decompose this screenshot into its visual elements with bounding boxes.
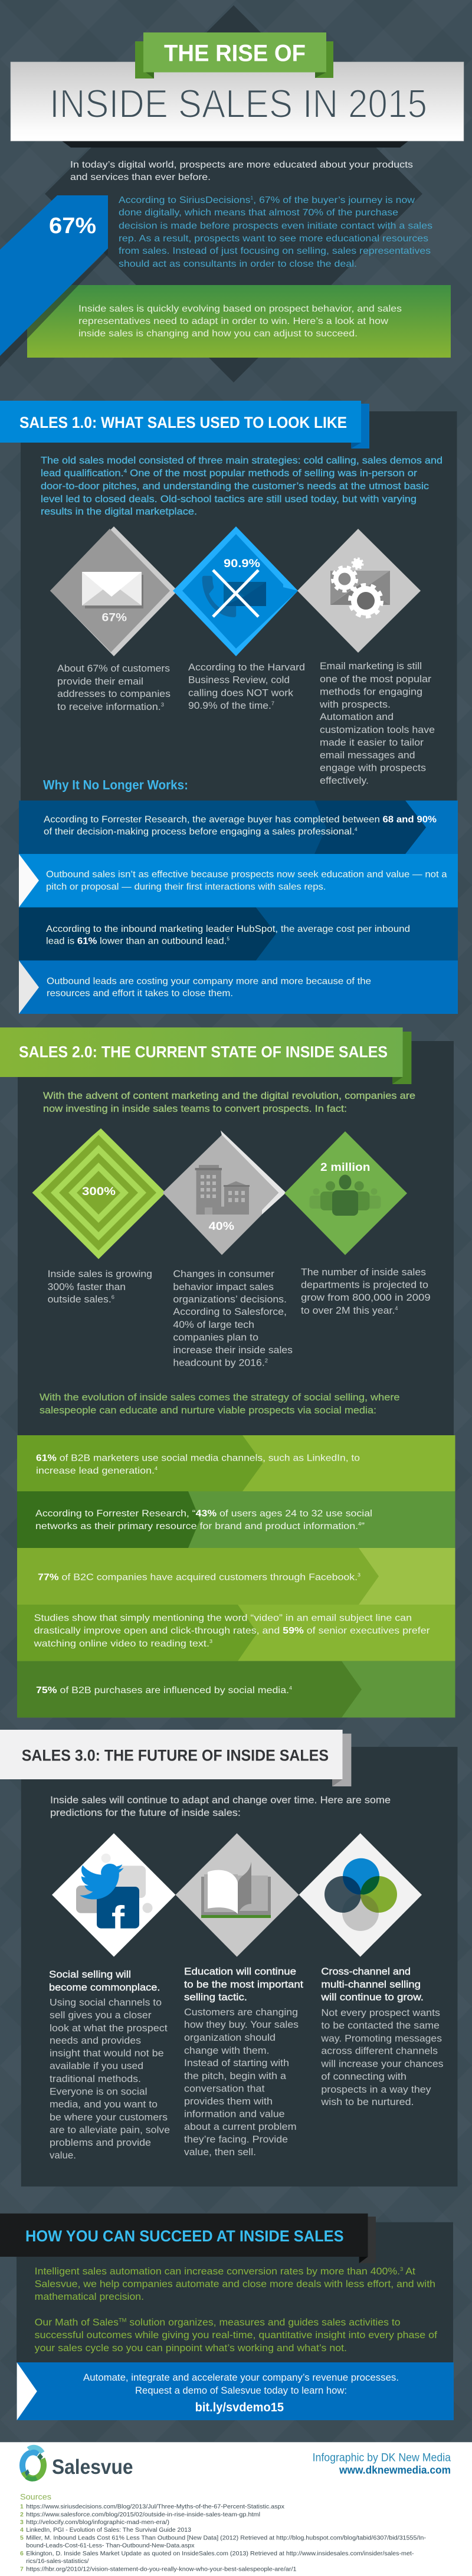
panel: sales 3.0 — [0, 1730, 458, 2187]
bar: video 59 percent: watching online video to reading text. — [34, 1639, 189, 1649]
bar: 43 percent forrester: ” — [361, 1521, 365, 1531]
callout: 67 percent blue ribbon: 67% — [49, 214, 96, 238]
bar: forrester 68 and 90 percent: 4 — [355, 827, 358, 832]
text block: cross-channel: prospects in a way they — [321, 2084, 431, 2095]
bar: forrester 68 and 90 percent: According to Forrester Research, the average buyer has completed between 68 and 90% — [44, 814, 437, 824]
text block: siriusdecisions: done digitally, which means that almost 70% of the purchase — [119, 208, 398, 218]
heading ribbon: sales 1.0 — [0, 401, 369, 449]
text block: email marketing: with prospects. — [319, 699, 391, 710]
sources: LinkedIn, PGI - Evolution of Sales: The Survival Guide 2013 — [26, 2526, 191, 2534]
text block: inside sales departments: to over 2M this year. — [301, 1305, 391, 1316]
text block: social selling: be where your customers — [50, 2112, 168, 2123]
text block: consumer behavior: Changes in consumer — [173, 1268, 274, 1279]
text block: consumer behavior: increase their inside sales — [173, 1344, 293, 1356]
text block: email marketing: one of the most popular — [320, 673, 431, 685]
bar: 43 percent forrester: networks as their primary resource for brand and product information. — [35, 1521, 325, 1531]
heading ribbon: succeed: HOW YOU CAN SUCCEED AT INSIDE SALES — [25, 2227, 344, 2245]
text block: social selling intro: salespeople can educate and nurture viable prospects via social media: — [40, 1405, 376, 1416]
text block: intelligent automation: Intelligent sales automation can increase conversion rates by more than 400%. — [35, 2266, 385, 2277]
heading ribbon: sales 2.0: SALES 2.0: THE CURRENT STATE OF INSIDE SALES — [19, 1043, 388, 1061]
sources: https://www.siriusdecisions.com/Blog/2013/Jul/Three-Myths-of-the-67-Percent-Statistic.aspx — [26, 2503, 285, 2510]
text block: social selling intro — [40, 1392, 400, 1416]
text block: consumer behavior — [173, 1268, 293, 1369]
text block: social selling: needs and provides — [50, 2035, 141, 2046]
icon: social diamond — [52, 1833, 176, 1957]
text block: siriusdecisions: from sales. Instead of just focusing on selling, sales representatives — [119, 246, 431, 256]
sources: 6 — [20, 2550, 24, 2557]
title: the rise of: THE RISE OF — [164, 40, 306, 66]
sources: 5 — [20, 2535, 24, 2542]
text block: education: Customers are changing — [184, 2007, 298, 2018]
icon: gears diamond — [297, 529, 421, 653]
heading ribbon: sales 2.0 — [0, 1027, 411, 1084]
sources: 1 — [20, 2503, 24, 2510]
text block: social selling: become commonplace. — [49, 1982, 160, 1993]
bar: outbound sales: Outbound sales isn’t as effective because prospects now seek education and value — not a — [46, 870, 447, 880]
icon: bird — [80, 1864, 123, 1899]
text block: cross-channel: Not every prospect wants — [321, 2007, 440, 2018]
gear: medium — [333, 567, 356, 591]
bar: hubspot 61 percent — [19, 908, 458, 961]
icon: facebook — [97, 1887, 139, 1942]
footer — [0, 2442, 472, 2576]
bar: hubspot 61 percent: 5 — [227, 936, 230, 941]
icon: email diamond 67 percent — [50, 526, 178, 656]
text block: old sales model: lead qualification. — [41, 467, 118, 479]
text block: education: value, then sell. — [184, 2146, 256, 2158]
call to action bar: Automate, integrate and accelerate your company’s revenue processes. — [83, 2372, 399, 2383]
text block: social selling: look at what the prospect — [50, 2022, 168, 2034]
text block: inside sales departments: 4 — [395, 1305, 398, 1311]
text block: email marketing: methods for engaging — [320, 686, 422, 698]
text block: 300 percent faster: outside sales. — [48, 1294, 109, 1305]
text block: math of sales — [35, 2317, 437, 2354]
bar: video 59 percent: 3 — [209, 1639, 213, 1644]
text block: old sales model: door-to-door pitches, and understanding the customer’s needs at the utmost basic — [41, 480, 430, 492]
sources: rics/16-sales-statistics/ — [26, 2558, 89, 2565]
bar: 77 percent b2c: 77% of B2C companies have acquired customers through Facebook. — [38, 1573, 328, 1583]
intro text — [70, 160, 413, 182]
bar: 61 percent b2b marketers: increase lead generation. — [36, 1466, 142, 1476]
text block: education: change with them. — [184, 2045, 270, 2056]
icon: email diamond 67 percent: 67% — [101, 611, 127, 624]
text block: 300 percent faster — [48, 1268, 152, 1305]
sources: 3 — [20, 2519, 24, 2526]
text block: harvard business review: According to the Harvard — [188, 662, 305, 673]
text block: cross-channel: multi-channel selling — [321, 1979, 421, 1990]
text block: email marketing — [319, 660, 435, 786]
sources: https://www.salesforce.com/blog/2015/02/outside-in-rise-inside-sales-team-gp.html — [26, 2511, 260, 2518]
text block: social selling: available if you used — [50, 2060, 143, 2071]
text block: email marketing: effectively. — [320, 775, 369, 786]
text block: social selling: traditional methods. — [50, 2073, 141, 2084]
text block: social selling: sell gives you a closer — [50, 2009, 152, 2021]
text block: harvard business review: 90.9% of the time. — [188, 700, 269, 711]
panel: how you can succeed — [0, 2214, 453, 2363]
text block: education: the pitch, begin with a — [184, 2070, 287, 2081]
bar: 43 percent forrester: 4 — [358, 1521, 362, 1527]
icon: buildings diamond 40 percent — [163, 1131, 286, 1255]
text block: cross-channel — [320, 1966, 444, 2107]
text block: email marketing: made it easier to tailor — [320, 737, 424, 748]
text block: education: organization should — [184, 2032, 276, 2043]
call to action bar — [17, 2362, 454, 2420]
bar: outbound leads — [19, 961, 458, 1014]
text block: siriusdecisions: should act as consultants in order to close the deal. — [119, 259, 357, 269]
text block: social selling: problems and provide — [50, 2137, 151, 2148]
text block: cross-channel: of connecting with — [321, 2071, 407, 2082]
text block: email marketing: engage with prospects — [320, 762, 426, 774]
bar: forrester 68 and 90 percent — [19, 800, 458, 854]
bar: 75 percent b2b purchases: 75% of B2B purchases are influenced by social media. — [36, 1685, 266, 1695]
text block: email marketing: email messages and — [320, 749, 415, 761]
icon: cold call diamond 90.9 percent: 90.9% — [224, 558, 260, 570]
text block: education: selling tactic. — [184, 1991, 247, 2003]
icon: people diamond 2 million: 2 million — [320, 1161, 371, 1174]
text block: consumer behavior: According to Salesforce, — [173, 1306, 287, 1317]
text block: cross-channel: will increase your chances — [320, 2058, 444, 2069]
bar: forrester 68 and 90 percent: of their decision-making process before engaging a sales professional. — [44, 827, 339, 837]
text block: old sales model: The old sales model consisted of three main strategies: cold calling, sales demos and — [41, 454, 442, 466]
text block: inside sales departments: The number of inside sales — [301, 1266, 426, 1278]
text block: intelligent automation: At — [403, 2266, 415, 2277]
bar: 61 percent b2b marketers: 4 — [155, 1466, 158, 1471]
logo: salesvue — [22, 2447, 133, 2479]
text block: 67 percent email addresses — [57, 663, 171, 712]
text block: cross-channel: across different channels — [321, 2045, 438, 2057]
icon: nested diamond 300 percent — [32, 1128, 166, 1259]
text block: old sales model: level led to closed deals. Old-school tactics are still used today, but with varying — [41, 493, 417, 505]
bar: hubspot 61 percent: lead is 61% lower than an outbound lead. — [46, 936, 221, 946]
text block: harvard business review: calling does NOT work — [188, 687, 294, 699]
text block: old sales model: 4 — [124, 468, 127, 474]
text block: 300 percent faster: 300% faster than — [48, 1281, 126, 1292]
text block: cross-channel: wish to be nurtured. — [320, 2096, 414, 2107]
sources: Miller, M. Inbound Leads Cost 61% Less Than Outbound [New Data] (2012) Retrieved at http://blog.hubspot.com/blog/tabid/6307/bid/31555/In- — [26, 2535, 427, 2542]
bar: video 59 percent: Studies show that simply mentioning the word “video” in an email subject line can — [34, 1613, 412, 1623]
text block: math of sales: successful outcomes while giving you real-time, quantitative insight into every phase of — [35, 2329, 437, 2341]
text block: consumer behavior: headcount by 2016. — [173, 1357, 261, 1369]
text block: intelligent automation: 3 — [400, 2266, 403, 2272]
text block: old sales model: results in the digital marketplace. — [41, 506, 197, 517]
sources — [20, 2492, 427, 2572]
bar: 75 percent b2b purchases: 4 — [289, 1685, 293, 1691]
text block: 67 percent email addresses: addresses to companies — [57, 688, 171, 699]
text block: education: Education will continue — [184, 1966, 296, 1977]
text block: 67 percent email addresses: provide their email — [57, 676, 143, 687]
text block: inside sales departments: grow from 800,000 in 2009 — [301, 1292, 431, 1303]
text block: education: information and value — [184, 2108, 285, 2120]
text block: siriusdecisions: rep. As a result, prospects want to see more educational resources — [119, 234, 428, 244]
sources: Sources — [20, 2492, 51, 2502]
bar: outbound sales — [19, 854, 458, 908]
text block: social selling: Social selling will — [49, 1969, 131, 1980]
text block: advent of content marketing: now investing in inside sales teams to convert prospects. In fact: — [43, 1103, 347, 1114]
bar: outbound leads: resources and effort it takes to close them. — [47, 988, 233, 999]
icon: book diamond — [176, 1833, 299, 1957]
sources: Elkington, D. Inside Sales Market Update as quoted on InsideSales.com (2013) Retrieved at http://www.insidesales.com/insider/sales-met- — [26, 2550, 414, 2557]
text block: intelligent automation: Salesvue, we help companies automate and close more deals with less effort, and with — [35, 2279, 435, 2290]
text block: predictions intro: predictions for the future of inside sales: — [50, 1807, 241, 1818]
text block: inside sales departments — [301, 1266, 431, 1316]
icon: nested diamond 300 percent: 300% — [82, 1186, 116, 1198]
text block: social selling: value. — [50, 2150, 76, 2161]
bar: 61 percent b2b marketers — [17, 1435, 455, 1491]
text block: social selling — [49, 1969, 170, 2161]
text block: predictions intro: Inside sales will continue to adapt and change over time. Here are some — [50, 1795, 391, 1806]
text block: education: conversation that — [184, 2083, 265, 2094]
intro text: In today’s digital world, prospects are more educated about your products — [70, 160, 413, 170]
sources: http://velocify.com/blog/infographic-mad-men-era/) — [26, 2519, 169, 2526]
text block: 67 percent email addresses: 3 — [161, 702, 164, 708]
sources: 4 — [20, 2526, 24, 2534]
bar: 61 percent b2b marketers: 61% of B2B marketers use social media channels, such as LinkedIn, to — [36, 1453, 360, 1464]
text block: cross-channel: to be contacted the same — [321, 2020, 440, 2031]
text block: old sales model: One of the most popular methods of selling was in-person or — [127, 467, 417, 479]
text block: email marketing: customization tools have — [320, 724, 435, 735]
text block: math of sales: your sales cycle so you can pinpoint what’s working and what’s not. — [35, 2342, 347, 2354]
panel: sales 2.0 — [0, 1027, 454, 1435]
text block: social selling: Everyone is on social — [50, 2086, 148, 2097]
panel: green evolving callout: representatives need to adapt in order to win. Here’s a look at how — [78, 316, 388, 326]
text block: math of sales: Our Math of Sales — [35, 2317, 116, 2328]
text block: harvard business review — [188, 662, 305, 711]
icon: overlapping circles diamond — [299, 1833, 422, 1957]
heading ribbon: sales 3.0 — [0, 1730, 351, 1786]
text block: education: about a current problem — [184, 2121, 297, 2132]
credit: dk new media — [313, 2451, 451, 2476]
text block: cross-channel: Cross-channel and — [321, 1966, 411, 1977]
panel: green evolving callout — [27, 285, 451, 358]
text block: inside sales departments: departments is projected to — [301, 1279, 428, 1290]
intro text: and services than ever before. — [70, 172, 211, 182]
text block: email marketing: Automation and — [320, 711, 394, 722]
text block: education: provides them with — [184, 2096, 273, 2107]
text block: siriusdecisions: 1 — [250, 195, 254, 201]
text block: advent of content marketing: With the advent of content marketing and the digital revolution, companies are — [43, 1090, 415, 1101]
bar: 43 percent forrester: According to Forrester Research, “ 43% of users ages 24 to 32 use social — [35, 1508, 372, 1519]
subheading: why it no longer works: Why It No Longer Works: — [43, 778, 188, 792]
text block: education: how they buy. Your sales — [184, 2019, 299, 2030]
sources: 7 — [20, 2565, 24, 2572]
call to action bar: Request a demo of Salesvue today to learn how: — [135, 2385, 347, 2396]
bar: video 59 percent: drastically improve open and click-through rates, and 59% of senior executives prefer — [34, 1626, 430, 1636]
bar: outbound sales: pitch or proposal — during their first interactions with sales reps. — [46, 882, 326, 892]
panel: sales 1.0 — [0, 401, 457, 801]
title banner — [11, 32, 464, 148]
gear: big — [350, 585, 382, 617]
text block: education: Instead of starting with — [184, 2057, 289, 2068]
heading ribbon: succeed — [0, 2214, 376, 2263]
text block: consumer behavior: 40% of large tech — [173, 1319, 254, 1330]
credit: dk new media: www.dknewmedia.com — [339, 2464, 451, 2476]
text block: siriusdecisions: According to SiriusDecisions — [119, 195, 238, 205]
text block: consumer behavior: companies plan to — [173, 1332, 258, 1343]
bar: 75 percent b2b purchases — [17, 1661, 455, 1717]
text block: cross-channel: way. Promoting messages — [320, 2032, 442, 2044]
bar: 77 percent b2c — [17, 1548, 455, 1605]
sources: 2 — [20, 2511, 24, 2518]
heading ribbon: sales 3.0: SALES 3.0: THE FUTURE OF INSIDE SALES — [22, 1746, 329, 1764]
text block: 67 percent email addresses: About 67% of customers — [57, 663, 170, 674]
call to action bar: bit.ly/svdemo15 — [195, 2401, 284, 2414]
text block: 300 percent faster: 6 — [112, 1294, 114, 1300]
text block: cross-channel: will continue to grow. — [320, 1991, 424, 2003]
text block: siriusdecisions: , 67% of the buyer’s journey is now — [253, 195, 415, 205]
text block: harvard business review: Business Review, cold — [188, 674, 290, 686]
text block: math of sales: TM — [119, 2317, 126, 2323]
callout: 67 percent blue ribbon — [0, 195, 108, 367]
text block: harvard business review: 7 — [271, 701, 274, 706]
bar: outbound leads: Outbound leads are costing your company more and more because of the — [47, 976, 371, 987]
panel: green evolving callout: Inside sales is quickly evolving based on prospect behavior, and sales — [78, 304, 402, 314]
text block: intelligent automation: mathematical precision. — [35, 2291, 144, 2302]
gear: small — [352, 558, 363, 569]
text block: social selling: insight that would not be — [50, 2048, 164, 2058]
icon: cold call diamond 90.9 percent — [173, 526, 298, 656]
text block: email marketing: Email marketing is still — [320, 660, 422, 672]
text block: education: they’re facing. Provide — [184, 2134, 288, 2145]
credit: dk new media: Infographic by DK New Media — [313, 2451, 451, 2464]
title: inside sales in 2015: INSIDE SALES IN 2015 — [50, 81, 427, 126]
text block: old sales model — [41, 454, 442, 517]
text block: social selling: are to alleviate pain, solve — [50, 2125, 170, 2136]
bar: video 59 percent — [17, 1605, 455, 1661]
text block: education: to be the most important — [184, 1979, 303, 1990]
sources: https://hbr.org/2010/12/vision-statement-do-you-really-know-who-your-best-salespeople-are/ar/1 — [26, 2565, 297, 2572]
text block: consumer behavior: behavior impact sales — [173, 1281, 274, 1292]
bar: hubspot 61 percent: According to the inbound marketing leader HubSpot, the average cost per inbound — [46, 924, 410, 934]
buildings — [195, 1165, 250, 1215]
bar: 43 percent forrester — [17, 1491, 455, 1548]
icon: facebook: f — [112, 1898, 125, 1942]
logo: salesvue: Salesvue — [52, 2456, 133, 2479]
text block: education — [184, 1966, 303, 2158]
text block: siriusdecisions — [119, 195, 432, 269]
icon: people diamond 2 million — [284, 1131, 407, 1255]
text block: consumer behavior: 2 — [265, 1358, 268, 1364]
text block: social selling: media, and you want to — [50, 2099, 158, 2110]
text block: predictions intro — [50, 1795, 391, 1818]
text block: consumer behavior: organizations’ decisions. — [173, 1294, 287, 1305]
text block: social selling: Using social channels to — [50, 1996, 162, 2008]
text block: 67 percent email addresses: to receive information. — [57, 701, 156, 712]
sources: bound-Leads-Cost-61-Less- Than-Outbound-New-Data.aspx — [26, 2542, 195, 2549]
bar: 77 percent b2c: 3 — [358, 1573, 361, 1578]
text block: math of sales: solution organizes, measures and guides sales activities to — [126, 2317, 401, 2328]
icon: buildings diamond 40 percent: 40% — [209, 1220, 234, 1233]
panel: green evolving callout: inside sales is changing and how you can adjust to succeed. — [78, 329, 358, 339]
text block: intelligent automation — [35, 2266, 435, 2302]
heading ribbon: sales 1.0: SALES 1.0: WHAT SALES USED TO LOOK LIKE — [19, 414, 347, 431]
text block: siriusdecisions: decision is made before prospects even initiate contact with a sales — [119, 221, 432, 231]
text block: advent of content marketing — [43, 1090, 415, 1114]
text block: social selling intro: With the evolution of inside sales comes the strategy of social selling, where — [40, 1392, 400, 1403]
text block: 300 percent faster: Inside sales is growing — [48, 1268, 152, 1279]
